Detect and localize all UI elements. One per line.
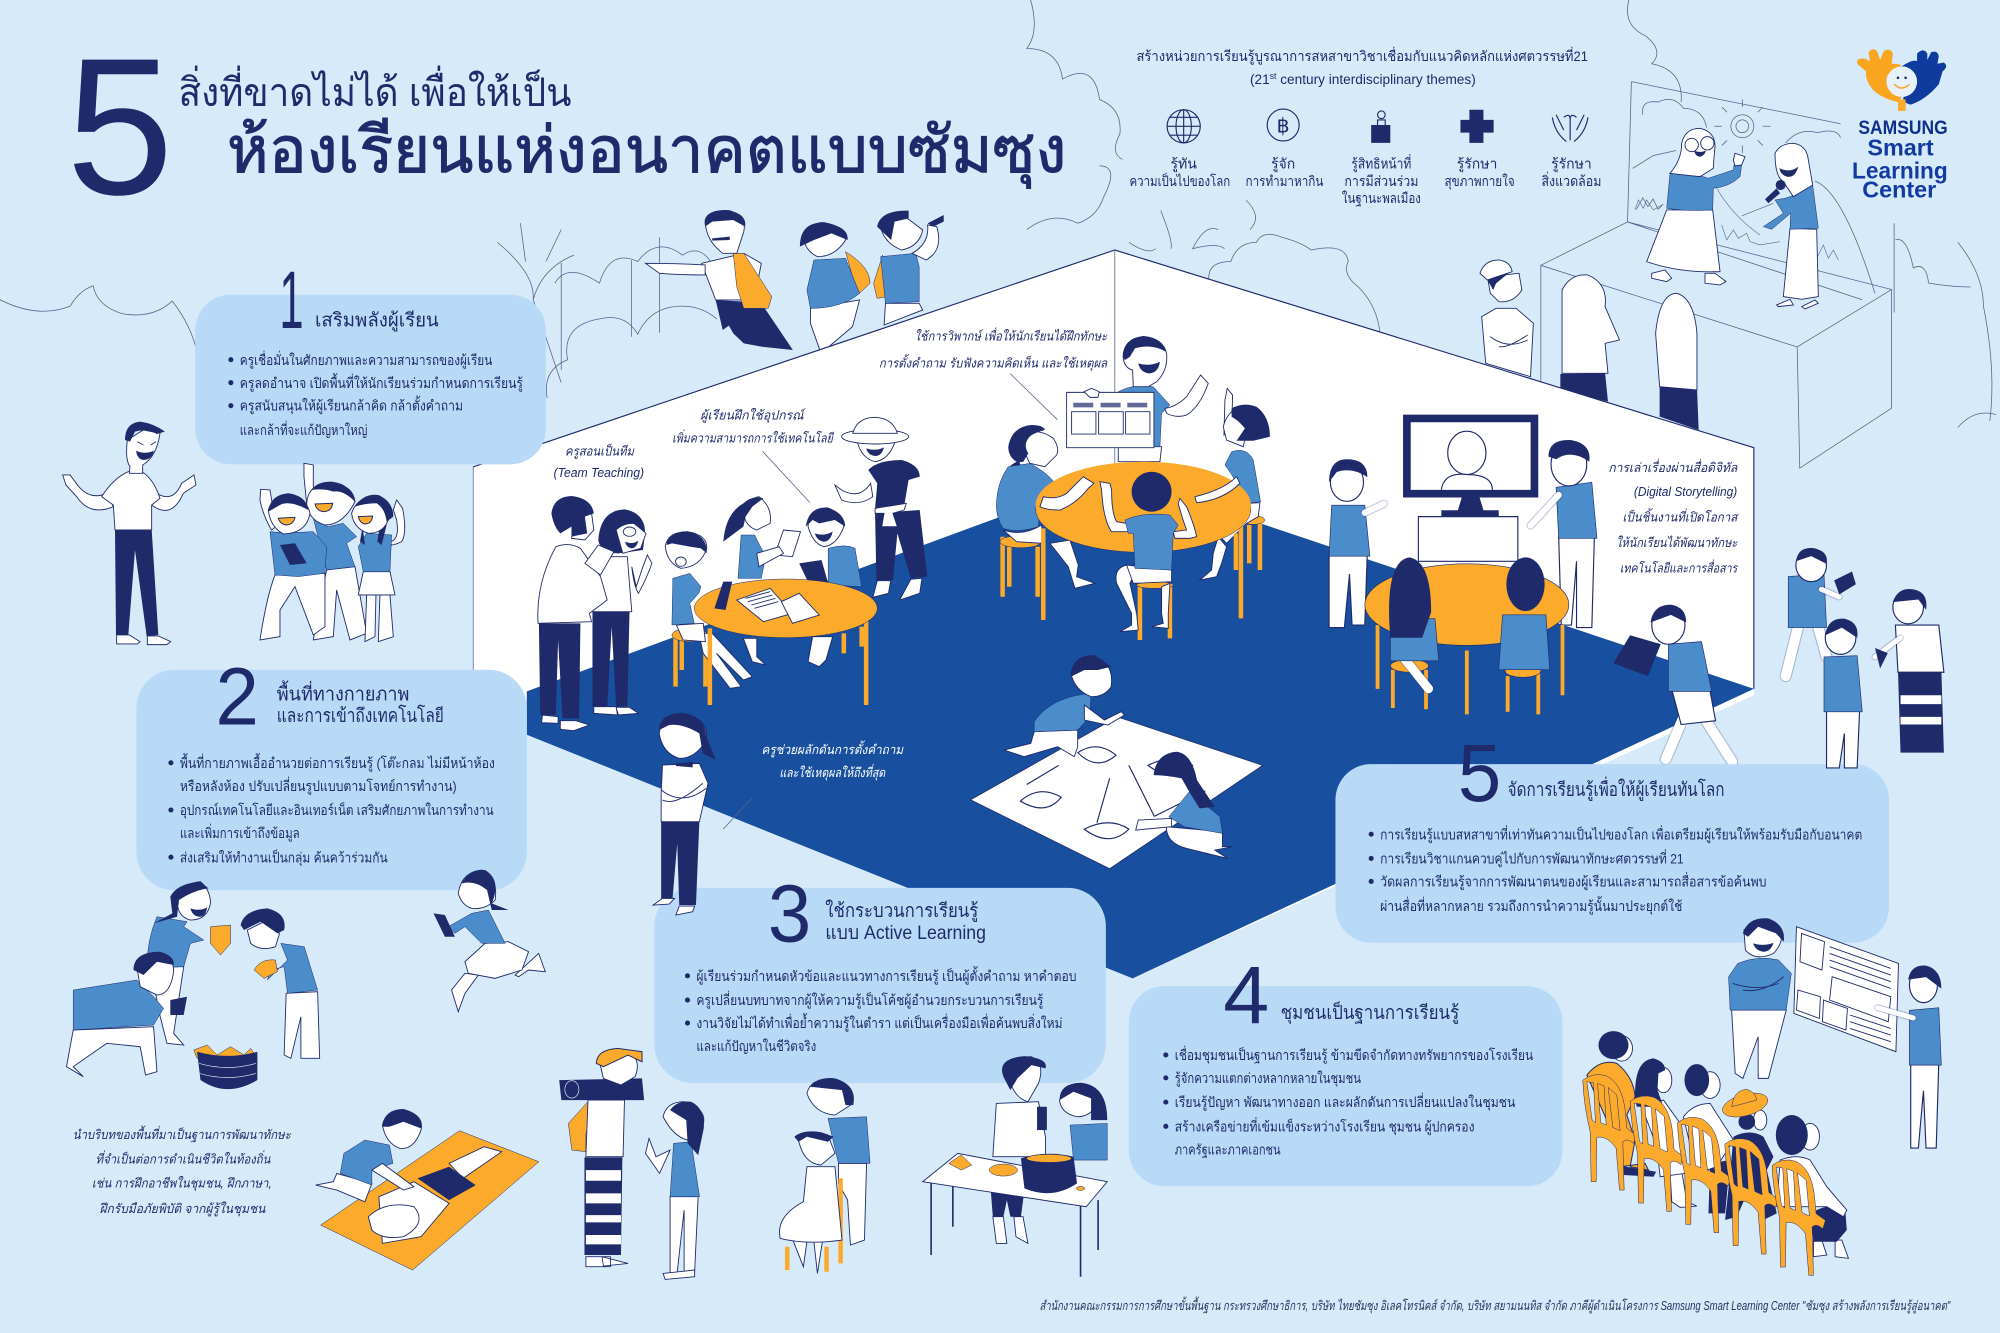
boy kneeling with phone [67,952,187,1077]
hijab girl [1560,275,1619,402]
panel 3 number: 3 [768,868,811,959]
student three with tablet [799,507,862,587]
laptop boy [1614,605,1732,762]
woman in sarong with mic [1875,589,1944,753]
annotation: local context [73,1125,292,1217]
man in white shirt waving [63,422,196,645]
seated girl braid [1499,557,1550,714]
woman holding crab [147,882,231,1045]
annotation: team teaching: ครูสอนเป็นทีม [565,443,634,459]
annotation: teacher pushes questioning [761,740,904,781]
panel 4 bullets: เรียนรู้ปัญหา พัฒนาทางออก และผลักดันการเปลี่ยนแปลงในชุมชน [1175,1093,1516,1111]
stage grass and cord [1635,188,1838,260]
annotation: critique: การตั้งคำถาม รับฟังความคิดเห็น และใช้เหตุผล [879,353,1108,371]
student two with notebook [723,497,801,578]
table two top [1036,462,1251,552]
theme: health [1445,110,1515,190]
logo: SAMSUNG [1858,118,1948,139]
panel 4 [1129,950,1562,1186]
panel 5 [1335,728,1889,943]
icon: globe [1167,110,1200,143]
annotation: critique: ใช้การวิพากษ์ เพื่อให้นักเรียนได้ฝึกทักษะ [915,327,1108,344]
three cheering students [260,463,405,642]
annotation: digital storytelling: การเล่าเรื่องผ่านสื่อดิจิทัล [1608,458,1738,475]
title: 5 [66,18,173,236]
person four with hat [1720,1089,1778,1254]
massage scene [316,1109,539,1270]
orange mat [321,1131,539,1270]
logo [1852,49,1948,203]
left student on stool [996,425,1095,597]
student one on stool [665,532,752,688]
logo: Learning [1852,158,1948,184]
panel 2 number: 2 [216,652,259,743]
presenter [1729,918,1791,1078]
background clouds and trees [0,0,1996,427]
interdisciplinary themes header [1136,47,1588,87]
annotation: team teaching [554,443,644,480]
logo: Smart [1867,135,1934,161]
hat teacher [835,417,927,600]
interdisciplinary themes header: สร้างหน่วยการเรียนรู้บูรณาการสหสาขาวิชาเชื่อมกับแนวคิดหลักแห่งศตวรรษที่21 [1136,47,1588,65]
icon: bulb face [1886,66,1917,111]
theme: environment: สิ่งแวดล้อม [1541,172,1601,189]
raising hand girl [1200,388,1270,580]
presentation scene [1729,918,1898,1078]
panel 3 bullets: งานวิจัยไม่ได้ทำเพื่อย้ำความรู้ในตำรา แต่เป็นเครื่องมือเพื่อค้นพบสิ่งใหม่ [696,1013,1062,1032]
back audience behind the wall [1480,260,1699,430]
theme: global awareness: รู้ทัน [1170,155,1197,172]
panel 2 heading [277,680,444,727]
hijab girl from behind [1656,293,1699,430]
girl with mic [1824,619,1862,768]
annotation: team teaching: (Team Teaching) [554,465,644,480]
standing boy [1531,440,1597,628]
icon: podium [1371,111,1390,143]
standing woman [807,1078,870,1245]
theme: environment: รู้รักษา [1551,155,1592,172]
icon: orange hand [1857,49,1902,102]
woman one on stage [1647,128,1745,285]
lower scenes [316,1048,1107,1279]
annotation: technology use: ผู้เรียนฝึกใช้อุปกรณ์ [700,408,806,424]
panel 5 heading: จัดการเรียนรู้เพื่อให้ผู้เรียนทันโลก [1508,776,1724,801]
panel 3 [654,868,1106,1083]
panel 4 bullets: รู้จักความแตกต่างหลากหลายในชุมชน [1175,1070,1361,1087]
theme: financial literacy: การทำมาหากิน [1246,173,1324,189]
panel 3 heading: ใช้กระบวนการเรียนรู้ [825,899,978,922]
barber and seated customer [780,1078,870,1273]
floor map paper [971,717,1263,869]
annotation: local context: นำบริบทของพื้นที่มาเป็นฐานการพัฒนาทักษะ [73,1125,292,1143]
cook man [991,1056,1047,1243]
panel 1 bullets: และกล้าที่จะแก้ปัญหาใหญ่ [240,421,367,438]
panel 1 bullets: ครูลดอำนาจ เปิดพื้นที่ให้นักเรียนร่วมกำหนดการเรียนรู้ [240,373,523,392]
panel 4 bullets: ภาครัฐและภาคเอกชน [1175,1141,1281,1158]
seated person with cape [780,1131,842,1273]
seated audience with orange chairs [1583,1031,1848,1275]
person three [1677,1064,1733,1233]
theme: civic [1342,111,1421,207]
monitor [1403,415,1538,561]
student middle [304,463,367,640]
flying girl with tablet [433,870,545,1012]
panel 5 bullets: ผ่านสื่อที่หลากหลาย รวมถึงการนำความรู้นั้นมาประยุกต์ใช้ [1380,896,1682,915]
room figures: table two group [996,336,1270,640]
panel 2 heading: และการเข้าถึงเทคโนโลยี [277,704,444,727]
student left [260,489,327,640]
logo: Center [1862,177,1936,203]
theme: global awareness: ความเป็นไปของโลก [1129,172,1230,189]
panel 5 bullets: วัดผลการเรียนรู้จากการพัฒนาตนของผู้เรียนและสามารถสื่อสารข้อค้นพบ [1380,873,1767,891]
table one [694,579,877,705]
theme: health: สุขภาพกายใจ [1445,173,1515,190]
lying person [368,1147,502,1243]
panel 5 bullets: การเรียนรู้แบบสหสาขาที่เท่าทันความเป็นไปของโลก เพื่อเตรียมผู้เรียนให้พร้อมรับมือกับอนาคต [1380,825,1862,843]
panel 2 bullets: หรือหลังห้อง ปรับเปลี่ยนรูปแบบตามโจทย์การทำงาน) [180,777,457,795]
panel 3 bullets [685,966,1077,1054]
panel 3 bullets: ผู้เรียนร่วมกำหนดหัวข้อและแนวทางการเรียนรู้ เป็นผู้ตั้งคำถาม หาคำตอบ [696,966,1077,985]
theme: financial literacy: รู้จัก [1271,155,1295,172]
panel 1 bullets: ครูเชื่อมั่นในศักยภาพและความสามารถของผู้เรียน [240,351,493,369]
person two [1630,1058,1697,1211]
annotation: teacher pushes questioning: และใช้เหตุผลให้ถึงที่สุด [779,763,886,781]
panel 2 [136,652,527,890]
table with pot [923,1153,1107,1277]
annotation: teacher pushes questioning: ครูช่วยผลักดันการตั้งคำถาม [761,740,904,758]
theme: civic: ในฐานะพลเมือง [1342,190,1421,207]
icon: blue hand [1902,50,1946,105]
team teachers [538,496,652,731]
seated girl long hair [1389,557,1439,709]
girl drawing on map [1136,752,1233,858]
icon: plus [1460,110,1494,143]
man in cap [1480,260,1533,377]
panel 5 bullets [1369,825,1862,915]
boy drawing on map [1004,655,1125,757]
panel 1 number: 1 [279,255,304,346]
boy with phone [1786,548,1856,676]
theme: environment [1541,115,1601,189]
annotation: digital storytelling [1608,458,1739,576]
annotation: critique [879,327,1108,371]
girl talking to backpacker [646,1101,704,1279]
panel 2 bullets: พื้นที่กายภาพเอื้ออำนวยต่อการเรียนรู้ (โต๊ะกลม ไม่มีหน้าห้อง [180,753,495,772]
panel 2 bullets: อุปกรณ์เทคโนโลยีและอินเทอร์เน็ต เสริมศักยภาพในการทำงาน [180,801,494,819]
theme: civic: รู้สิทธิหน้าที่ [1351,154,1411,172]
pointing man [1878,966,1941,1148]
title: ห้องเรียนแห่งอนาคตแบบซัมซุง [227,114,1066,189]
crab scene and flying girl [67,713,716,1089]
person five [1772,1115,1848,1275]
annotation: digital storytelling: เทคโนโลยีและการสื่อสาร [1620,559,1739,576]
icon: baht coin: ฿ [1277,116,1290,138]
room figures: table one group [538,417,927,731]
theme: health: รู้รักษา [1457,155,1497,172]
kneeling child [316,1109,421,1202]
annotation: technology use: เพิ่มความสามารถการใช้เทคโนโลยี [672,429,835,446]
interdisciplinary themes header: (21 [1250,71,1270,87]
student from behind [1100,472,1197,640]
stage [1541,82,1892,468]
glasses girl [1329,459,1384,628]
panel 1 bullets: ครูสนับสนุนให้ผู้เรียนกล้าคิด กล้าตั้งคำถาม [240,396,463,415]
panel 2 bullets: ส่งเสริมให้ทำงานเป็นกลุ่ม ค้นคว้าร่วมกัน [180,848,388,866]
title [66,18,1066,236]
blue floor [527,475,1754,978]
panel 4 bullets: สร้างเครือข่ายที่เข้มแข็งระหว่างโรงเรียน ชุมชน ผู้ปกครอง [1175,1117,1474,1135]
annotation: technology use [672,408,835,446]
room figures: table three group [1329,415,1597,714]
stage figures [1635,128,1838,309]
cook girl [1060,1083,1107,1160]
panel 5 bullets: การเรียนวิชาแกนควบคู่ไปกับการพัฒนาทักษะศตวรรษที่ 21 [1380,850,1684,868]
panel 2 bullets [168,753,495,866]
woman with backpack [800,223,870,353]
panel 3 heading: แบบ Active Learning [825,923,986,944]
man with phone [874,211,944,325]
panel 1 heading: เสริมพลังผู้เรียน [315,310,439,332]
annotation: local context: เช่น การฝึกอาชีพในชุมชน, ฝึกภาษา, [92,1176,272,1192]
woman two on stage [1763,143,1818,309]
student legs under table [743,637,833,667]
boy holding crab [241,908,320,1058]
annotation: local context: ที่จำเป็นต่อการดำเนินชีวิตในท้องถิ่น [96,1149,271,1166]
annotation: local context: ฝึกรับมือภัยพิบัติ จากผู้รู้ในชุมชน [99,1201,266,1217]
presenter boy and board [1067,336,1208,462]
panel 5 number: 5 [1458,728,1501,819]
panel 4 heading: ชุมชนเป็นฐานการเรียนรู้ [1281,1000,1459,1025]
panel 4 number: 4 [1223,950,1269,1041]
panel 2 bullets: และเพิ่มการเข้าถึงข้อมูล [180,824,300,842]
annotation: digital storytelling: (Digital Storytelling) [1634,484,1737,499]
cooking table scene [923,1056,1107,1277]
panel 3 bullets: ครูเปลี่ยนบทบาทจากผู้ให้ความรู้เป็นโค้ชผู้อำนวยกระบวนการเรียนรู้ [696,991,1044,1009]
table three [1365,564,1569,714]
student right [352,495,405,642]
panel 4 bullets [1163,1046,1534,1158]
annotation: digital storytelling: เป็นชิ้นงานที่เปิดโอกาส [1622,508,1739,525]
right cluster [1786,548,1944,768]
panel 3 heading [825,899,986,944]
annotation: digital storytelling: ให้นักเรียนได้พัฒนาทักษะ [1616,535,1738,550]
figures behind the wall: walking group [646,210,944,353]
panel 1 [195,255,546,464]
basket with crabs [194,1045,257,1089]
panel 1 bullets [228,351,523,438]
right wall, left wall and room [473,250,1754,978]
theme: global awareness [1129,110,1230,189]
teacher one [538,496,614,731]
icon: hands with plant [1552,115,1588,142]
newspaper board [1794,927,1898,1052]
callout lines [723,374,1057,829]
backpacker with orange hair [559,1048,644,1267]
teacher two [592,509,652,715]
walking man pointing [646,210,793,350]
standing teacher with crossed arms [653,713,716,915]
theme: financial literacy [1246,109,1324,189]
panel 4 bullets: เชื่อมชุมชนเป็นฐานการเรียนรู้ ข้ามขีดจำกัดทางทรัพยากรของโรงเรียน [1175,1046,1534,1064]
interdisciplinary themes header: st [1270,71,1277,81]
theme: civic: การมีส่วนร่วม [1344,173,1418,189]
panel 2 heading: พื้นที่ทางกายภาพ [277,680,409,705]
person one [1583,1031,1656,1190]
table two legs [1043,527,1241,620]
interdisciplinary themes header: century interdisciplinary themes) [1276,71,1476,87]
title: สิ่งที่ขาดไม่ได้ เพื่อให้เป็น [179,65,571,115]
panel 3 bullets: และแก้ปัญหาในชีวิตจริง [696,1038,816,1054]
arms over the table [1040,477,1240,510]
